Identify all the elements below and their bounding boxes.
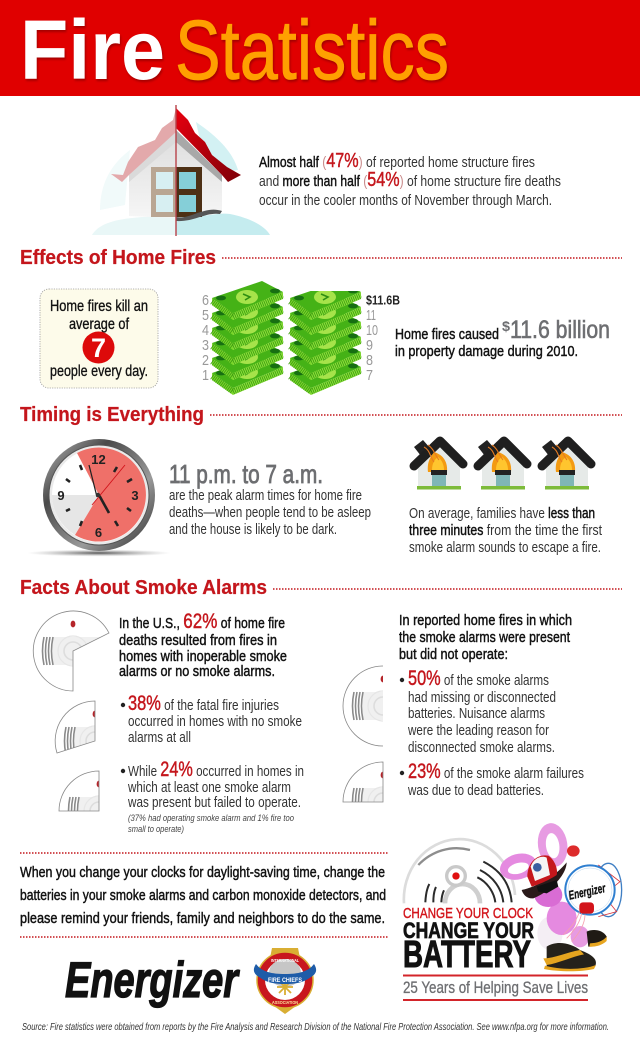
timing text: 11 p.m. to 7 a.m. [169, 459, 323, 489]
daylight-saving reminder [20, 853, 388, 937]
title: Statistics [175, 3, 449, 97]
intro text: occur in the cooler months of November through March. [259, 192, 552, 209]
right axis labels [366, 292, 400, 384]
callout: deaths per day: people every day. [50, 363, 148, 380]
alarm illustration [404, 839, 515, 903]
daylight-saving reminder: batteries in your smoke alarms and carbon monoxide detectors, and [20, 887, 386, 904]
logo: change your clock change your battery: CHANGE YOUR CLOCK [403, 905, 533, 922]
property damage text: $ [502, 318, 510, 334]
logo: change your clock change your battery: 25 Years of Helping Save Lives [403, 978, 588, 997]
callout: deaths per day: Home fires kill an [50, 298, 148, 315]
intro text: Almost half (47%) of reported home structure fires [259, 150, 535, 172]
logo: International Fire Chiefs Association badge: INTERNATIONAL [271, 958, 299, 963]
non-operating alarms intro: but did not operate: [399, 646, 508, 663]
icon: half-snow house [92, 105, 270, 236]
stat: 38 percent: occurred in homes with no smoke [128, 713, 302, 730]
title: Fire [20, 3, 165, 97]
heading: timing is everything: Timing is Everything [20, 403, 204, 426]
clock numerals: 12 [91, 452, 106, 467]
property damage text: 11.6 billion [510, 316, 610, 344]
left axis labels: 3 [202, 337, 209, 354]
escape time text [409, 505, 603, 556]
timing text: deaths—when people tend to be asleep [169, 504, 371, 521]
clock numerals: 9 [57, 488, 65, 503]
chart: money stacks [202, 281, 400, 395]
logo: change your clock change your battery: CHANGE YOUR [403, 918, 534, 943]
daylight-saving reminder: please remind your friends, family and neighbors to do the same. [20, 910, 385, 927]
right stack of bills [290, 281, 361, 395]
logo: Energizer: Energizer [65, 952, 240, 1008]
logo: International Fire Chiefs Association badge: FIRE CHIEFS [268, 978, 302, 984]
left axis labels: 6 [202, 292, 209, 309]
stat: 23 percent: was due to dead batteries. [407, 782, 544, 799]
stat: 38 percent: 38% of the fatal fire injuries [128, 692, 279, 715]
left axis labels [202, 292, 209, 384]
left axis labels: 1 [202, 367, 209, 384]
icon: alarm 50 percent [342, 666, 383, 746]
stat: 50 percent: batteries. Nuisance alarms [408, 705, 545, 722]
daylight-saving reminder: When you change your clocks for daylight-saving time, change the [20, 864, 385, 881]
stat: 50 percent [400, 667, 556, 756]
stat: 24 percent: was present but failed to operate. [127, 794, 301, 811]
clock numerals: 6 [95, 525, 102, 540]
stat: 24 percent: (37% had operating smoke alarm and 1% fire too [128, 813, 294, 824]
stat: 50 percent: 50% of the smoke alarms [408, 667, 549, 690]
intro text [259, 150, 561, 209]
timing text [169, 459, 371, 538]
right axis labels: 9 [366, 337, 373, 354]
clock numerals [57, 452, 139, 540]
stat: 38 percent [121, 692, 302, 746]
callout: deaths per day [40, 289, 158, 388]
icon: alarm 62 percent [33, 611, 113, 691]
icon: alarm 24 percent [58, 770, 100, 812]
left axis labels: 4 [202, 322, 209, 339]
escape time text: On average, families have less than [409, 505, 595, 522]
non-operating alarms intro: the smoke alarms were present [399, 629, 571, 646]
clock numerals: 3 [131, 488, 139, 503]
stat: 62 percent: homes with inoperable smoke [119, 648, 287, 665]
timing text: are the peak alarm times for home fire [169, 487, 362, 504]
stat: 62 percent: alarms or no smoke alarms. [119, 663, 275, 680]
stat: 50 percent: were the leading reason for [407, 722, 549, 739]
stat: 62 percent [119, 610, 287, 680]
character: pink bunny with drum [497, 821, 622, 971]
heading: effects of home fires: Effects of Home Fires [20, 246, 216, 269]
icon: red circle with 7: 7 [91, 333, 106, 363]
left axis labels: 5 [202, 307, 209, 324]
logo: change your clock change your battery: BATTERY [403, 934, 531, 976]
icon: clock with peak hours [27, 439, 171, 556]
icon: alarm 23 percent [342, 762, 384, 802]
stat: 24 percent [121, 758, 304, 835]
stat: 50 percent: disconnected smoke alarms. [408, 739, 555, 756]
property damage text: in property damage during 2010. [395, 343, 578, 360]
stat: 23 percent: 23% of the smoke alarm failures [408, 760, 584, 783]
logo: International Fire Chiefs Association badge [254, 948, 316, 1014]
right axis labels: 7 [366, 367, 373, 384]
logo: change your clock change your battery [403, 821, 622, 1000]
stat: 24 percent: small to operate) [128, 824, 184, 835]
title [20, 3, 449, 97]
character: pink bunny with drum: Energizer [567, 881, 607, 903]
header band [0, 0, 640, 97]
property damage text: Home fires caused [395, 326, 499, 343]
right axis labels: $11.6B [366, 292, 400, 308]
icon: alarm 38 percent [54, 700, 96, 754]
non-operating alarms intro: In reported home fires in which [399, 612, 572, 629]
stat: 62 percent: deaths resulted from fires in [119, 632, 277, 649]
stat: 23 percent [400, 760, 584, 799]
left stack of bills [212, 281, 283, 395]
logo: International Fire Chiefs Association badge: ASSOCIATION [272, 1000, 298, 1005]
left axis labels: 2 [202, 352, 209, 369]
escape time text: three minutes from the time the first [409, 522, 603, 539]
stat: 50 percent: had missing or disconnected [408, 689, 556, 706]
stat: 62 percent: In the U.S., 62% of home fire [119, 610, 285, 633]
stat: 38 percent: alarms at all [128, 729, 191, 746]
timing text: and the house is likely to be dark. [169, 521, 337, 538]
property damage text [395, 316, 610, 360]
stat: 24 percent: While 24% occurred in homes in [128, 758, 304, 781]
icons: burning houses [414, 440, 591, 490]
callout: deaths per day: average of [69, 316, 129, 333]
right axis labels: 11 [366, 307, 376, 324]
stat: 24 percent: which at least one smoke alarm [127, 779, 291, 796]
non-operating alarms intro [399, 612, 572, 663]
heading: facts about smoke alarms: Facts About Smoke Alarms [20, 576, 267, 599]
right axis labels: 10 [366, 322, 378, 339]
right axis labels: 8 [366, 352, 373, 369]
intro text: and more than half (54%) of home structure fire deaths [259, 169, 561, 191]
